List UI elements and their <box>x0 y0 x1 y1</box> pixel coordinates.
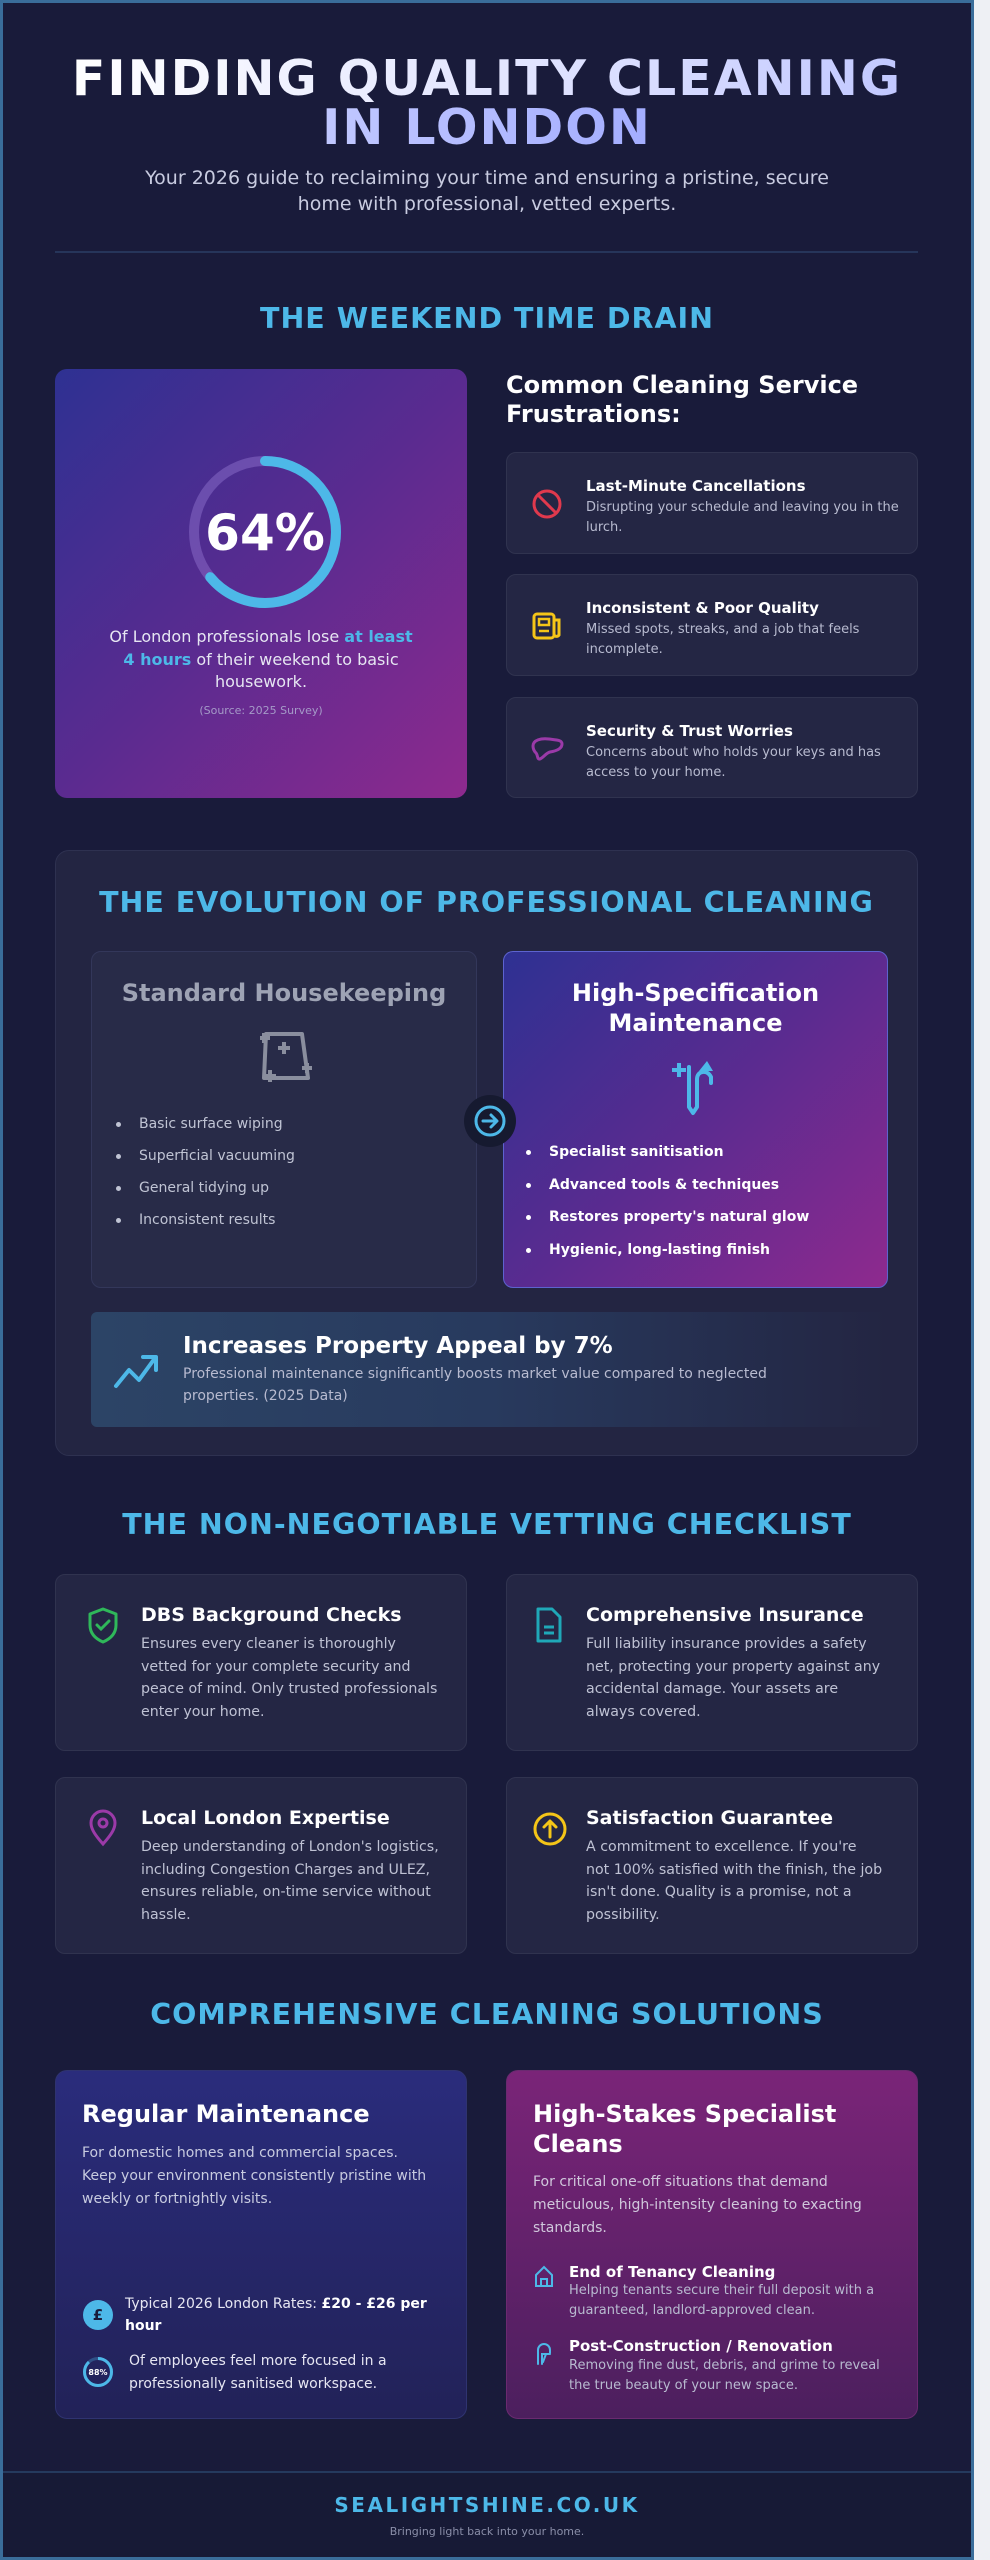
icon: house <box>535 2266 553 2287</box>
icon: arrow circle <box>534 1812 566 1846</box>
panel: regular maintenance: For domestic homes and commercial spaces. <box>82 2145 398 2161</box>
card: insurance: net, protecting your property against any <box>586 1659 880 1675</box>
panel: high-spec: Maintenance <box>608 1009 782 1037</box>
card: local expertise: hassle. <box>141 1907 191 1923</box>
icon: trend up <box>114 1355 158 1388</box>
heading: vetting: THE NON-NEGOTIABLE VETTING CHECKLIST <box>122 1508 852 1541</box>
card: DBS: peace of mind. Only trusted professionals <box>141 1681 437 1697</box>
chart: 88% ring <box>83 2357 113 2387</box>
card: local expertise <box>55 1777 467 1954</box>
chart: 64% ring: 64% <box>205 504 325 562</box>
card: satisfaction: isn't done. Quality is a promise, not a <box>586 1884 852 1900</box>
source: (Source: 2025 Survey) <box>199 704 323 717</box>
panel: regular maintenance: Regular Maintenance <box>82 2100 370 2128</box>
icon: sparkle clean <box>672 1061 713 1116</box>
arrow: transition <box>464 1095 516 1147</box>
callout: property appeal: Professional maintenance significantly boosts market value compared to neglected properties. (2025 Data) <box>183 1366 767 1404</box>
icon: newspaper <box>532 612 560 640</box>
card: DBS: enter your home. <box>141 1704 264 1720</box>
card: local expertise: Deep understanding of London's logistics, <box>141 1839 439 1855</box>
card: insurance: Full liability insurance provides a safety <box>586 1636 867 1652</box>
panel: regular maintenance: Typical 2026 London Rates: £20 - £26 per hour <box>125 2296 427 2334</box>
panel: specialist cleans: Removing fine dust, debris, and grime to reveal the true beauty of your new space. <box>569 2358 880 2392</box>
panel: standard housekeeping: General tidying up <box>139 1180 269 1196</box>
subtitle <box>145 167 829 215</box>
footer: SEALIGHTSHINE.CO.UK <box>334 2493 640 2517</box>
card: local expertise: Local London Expertise <box>141 1807 390 1829</box>
panel: high-spec: Hygienic, long-lasting finish <box>549 1242 770 1258</box>
panel: specialist cleans <box>506 2070 918 2419</box>
heading: frustrations: Frustrations: <box>506 400 681 428</box>
heading: frustrations <box>506 371 858 428</box>
stat text: 4 hours of their weekend to basic <box>123 650 399 668</box>
panel: high-spec: Advanced tools & techniques <box>549 1177 779 1193</box>
callout: property appeal <box>91 1312 888 1427</box>
icon: pound <box>83 2300 113 2330</box>
card: satisfaction <box>506 1777 918 1954</box>
icon: pin <box>90 1810 116 1846</box>
card: quality <box>506 574 918 676</box>
panel: standard housekeeping <box>91 951 477 1288</box>
panel: specialist cleans: High-Stakes Specialist Cleans <box>533 2100 836 2158</box>
callout: property appeal: Increases Property Appeal by 7% <box>183 1333 613 1359</box>
card: satisfaction: Satisfaction Guarantee <box>586 1807 833 1829</box>
panel: standard housekeeping: Inconsistent results <box>139 1212 275 1228</box>
panel: specialist cleans: For critical one-off situations that demand meticulous, high-intensity cleaning to exacting standards. <box>533 2174 862 2236</box>
card: local expertise: including Congestion Charges and ULEZ, <box>141 1862 430 1878</box>
subtitle: Your 2026 guide to reclaiming your time and ensuring a pristine, secure <box>145 167 829 189</box>
card: insurance: Comprehensive Insurance <box>586 1604 864 1626</box>
card: quality: Missed spots, streaks, and a job that feels incomplete. <box>586 622 859 656</box>
card: security: Security & Trust Worries <box>586 722 793 740</box>
icon: pound: £ <box>93 2306 103 2324</box>
icon: trust <box>532 737 564 761</box>
card: local expertise: ensures reliable, on-time service without <box>141 1884 431 1900</box>
icon: shield <box>88 1608 118 1644</box>
heading: frustrations: Common Cleaning Service <box>506 371 858 399</box>
panel: high-spec: Specialist sanitisation <box>549 1144 724 1160</box>
card: cancellations <box>506 452 918 554</box>
panel: specialist cleans: Post-Construction / Renovation <box>569 2337 833 2355</box>
card: satisfaction: possibility. <box>586 1907 660 1923</box>
icon: document <box>536 1608 562 1642</box>
panel: stat card <box>55 369 467 798</box>
footer <box>3 2473 971 2557</box>
card: quality: Inconsistent & Poor Quality <box>586 599 819 617</box>
title: FINDING QUALITY CLEANING <box>72 50 902 107</box>
heading: solutions: COMPREHENSIVE CLEANING SOLUTIONS <box>150 1998 824 2031</box>
card: security <box>506 697 918 798</box>
heading: weekend time drain: THE WEEKEND TIME DRAIN <box>260 302 714 335</box>
panel: specialist cleans: Helping tenants secure their full deposit with a guaranteed, landlord-approved clean. <box>569 2283 874 2318</box>
panel: high-spec <box>503 951 888 1288</box>
title: IN LONDON <box>322 99 652 156</box>
panel: high-spec: High-Specification <box>572 979 819 1007</box>
stat text: Of London professionals lose at least <box>109 627 413 646</box>
panel: standard housekeeping: Superficial vacuuming <box>139 1148 295 1164</box>
card: security: Concerns about who holds your keys and has access to your home. <box>586 745 881 780</box>
panel: evolution <box>55 850 918 1456</box>
card: insurance: always covered. <box>586 1704 701 1720</box>
card: satisfaction: A commitment to excellence. If you're <box>586 1839 856 1855</box>
panel: regular maintenance: Keep your environment consistently pristine with <box>82 2168 426 2184</box>
panel: standard housekeeping: Basic surface wiping <box>139 1116 283 1132</box>
subtitle: home with professional, vetted experts. <box>298 193 676 215</box>
icon: ban <box>532 490 562 518</box>
card: DBS: DBS Background Checks <box>141 1604 402 1626</box>
panel: regular maintenance <box>55 2070 467 2419</box>
stat text: housework. <box>215 672 307 691</box>
heading: evolution: THE EVOLUTION OF PROFESSIONAL CLEANING <box>99 886 874 919</box>
card: cancellations: Last-Minute Cancellations <box>586 477 806 495</box>
chart: 64% ring <box>189 456 341 608</box>
card: satisfaction: not 100% satisfied with the finish, the job <box>586 1862 882 1878</box>
card: insurance: accidental damage. Your assets are <box>586 1681 838 1697</box>
chart: 88% ring: 88% <box>88 2368 108 2377</box>
card: insurance <box>506 1574 918 1751</box>
card: DBS <box>55 1574 467 1751</box>
panel: high-spec: Restores property's natural glow <box>549 1209 809 1225</box>
card: DBS: Ensures every cleaner is thoroughly <box>141 1636 396 1652</box>
panel: regular maintenance: weekly or fortnightly visits. <box>82 2191 272 2207</box>
card: DBS: vetted for your complete security and <box>141 1659 411 1675</box>
panel: standard housekeeping: Standard Housekeeping <box>122 979 446 1007</box>
title <box>72 50 902 156</box>
footer: Bringing light back into your home. <box>390 2525 584 2538</box>
icon: renovation <box>537 2343 551 2365</box>
panel: specialist cleans: End of Tenancy Cleaning <box>569 2263 775 2281</box>
icon: basic clean <box>260 1032 312 1082</box>
panel: regular maintenance: Of employees feel more focused in a professionally sanitised workspace. <box>129 2353 387 2392</box>
stat text <box>109 627 413 691</box>
card: cancellations: Disrupting your schedule and leaving you in the lurch. <box>586 500 899 534</box>
